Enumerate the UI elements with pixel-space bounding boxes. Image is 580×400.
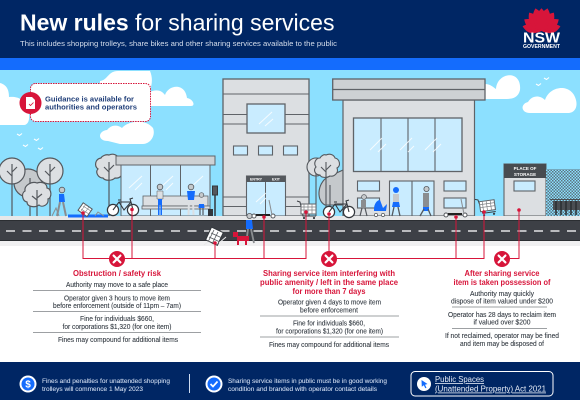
person walking right [420,186,431,216]
person walking [57,187,66,216]
place of storage [504,164,546,216]
panel: amenity: for more than 7 days [292,286,366,296]
traffic light [208,186,218,220]
person at bench [157,184,163,215]
bike obstruction [107,198,139,216]
icon: red cross 2 [321,251,337,267]
building right [333,79,485,216]
title: New rules for sharing services [20,10,334,36]
footer note: good working condition [206,376,387,393]
panel: possession [445,268,559,348]
act link box [411,372,553,396]
panel: obstruction: Authority may move to a safe place [66,282,168,289]
place of storage: PLACE OF [514,166,537,171]
street illustration [0,70,580,246]
icon: red cross 1 [109,251,125,267]
panel: amenity: Fines may compound for additional items [269,342,389,349]
footer note: good working condition: Sharing service items in public must be in good working [228,378,387,385]
panel: amenity: before enforcement [300,308,358,314]
panel: obstruction: Fine for individuals $660, [80,316,154,323]
panel: amenity: for corporations $1,320 (for one item) [276,328,383,336]
panel: possession: and item may be disposed of [460,341,544,348]
panel: obstruction: Operator given 3 hours to move item [64,296,170,302]
footer note: fines commence: trolleys will commence 1 May 2023 [42,386,143,393]
panel: possession: if valued over $200 [474,320,531,326]
subtitle: This includes shopping trolleys, share bikes and other sharing services available to the public [20,39,337,48]
logo: NSW Government: GOVERNMENT [523,44,560,50]
people and items [52,184,496,245]
panel: amenity: Fine for individuals $660, [293,320,365,328]
panel: possession: dispose of item valued under $200 [451,298,553,306]
scooter right [444,199,467,217]
building left [223,79,309,216]
callout: guidance: authorities and operators [45,104,137,112]
footer note: fines commence [20,376,170,393]
panel: obstruction: for corporations $1,320 (for one item) [62,324,172,331]
panel: amenity [260,268,399,349]
panel: obstruction: Fines may compound for additional items [58,337,178,344]
adult and child [187,184,204,215]
logo: NSW Government [521,7,562,50]
scooter at door [252,200,275,218]
trees left [0,158,63,216]
trolley left of tree [297,201,316,219]
bike in front of tree [323,200,355,218]
footer note: good working condition: condition and branded with operator contact details [228,386,378,393]
person with red dog [233,213,254,245]
panel: amenity: Sharing service item interfering with [263,268,395,278]
act link box: Public Spaces [435,375,484,384]
building left: EXIT [272,178,281,182]
panel: possession: After sharing service [464,268,540,278]
pavement and road [0,216,580,246]
footer note: fines commence: Fines and penalties for unattended shopping [42,378,170,385]
bus shelter [116,156,215,216]
footer note: fines commence: $ [25,380,31,390]
panel: possession: If not reclaimed, operator may be fined [445,333,559,340]
panel: obstruction [33,268,201,344]
red connector lines [81,208,521,258]
panel: possession: item is taken possession of [454,277,551,287]
tree by shelter [96,154,124,216]
panel: possession: Authority may quickly [470,291,534,298]
trees middle [307,154,343,216]
logo: NSW Government: NSW [523,30,561,46]
fence and stored trolleys [546,169,580,216]
panel: possession: Operator has 28 days to reclaim item [448,312,556,319]
panel: amenity: public amenity / left in the same place [260,277,398,287]
sky [0,70,580,217]
trolley right [475,197,496,217]
icon: red cross 3 [494,251,510,267]
callout: guidance [20,84,150,122]
clouds [0,71,577,144]
birds [17,78,549,150]
person with pram [360,187,400,217]
footer band [0,362,580,400]
panel: amenity: Operator given 4 days to move item [278,300,381,306]
act link box: (Unattended Property) Act 2021 [435,384,547,394]
footer divider [188,374,190,393]
fallen trolley in bushes [52,203,108,217]
panel: obstruction: before enforcement (outside of 11pm – 7am) [53,303,181,310]
header band [0,0,580,70]
callout: guidance: Guidance is available for [45,96,134,104]
building left: ENTRY [250,178,263,182]
panel: obstruction: Obstruction / safety risk [73,268,161,278]
trolley on road [204,227,226,245]
place of storage: STORAGE [514,172,536,177]
